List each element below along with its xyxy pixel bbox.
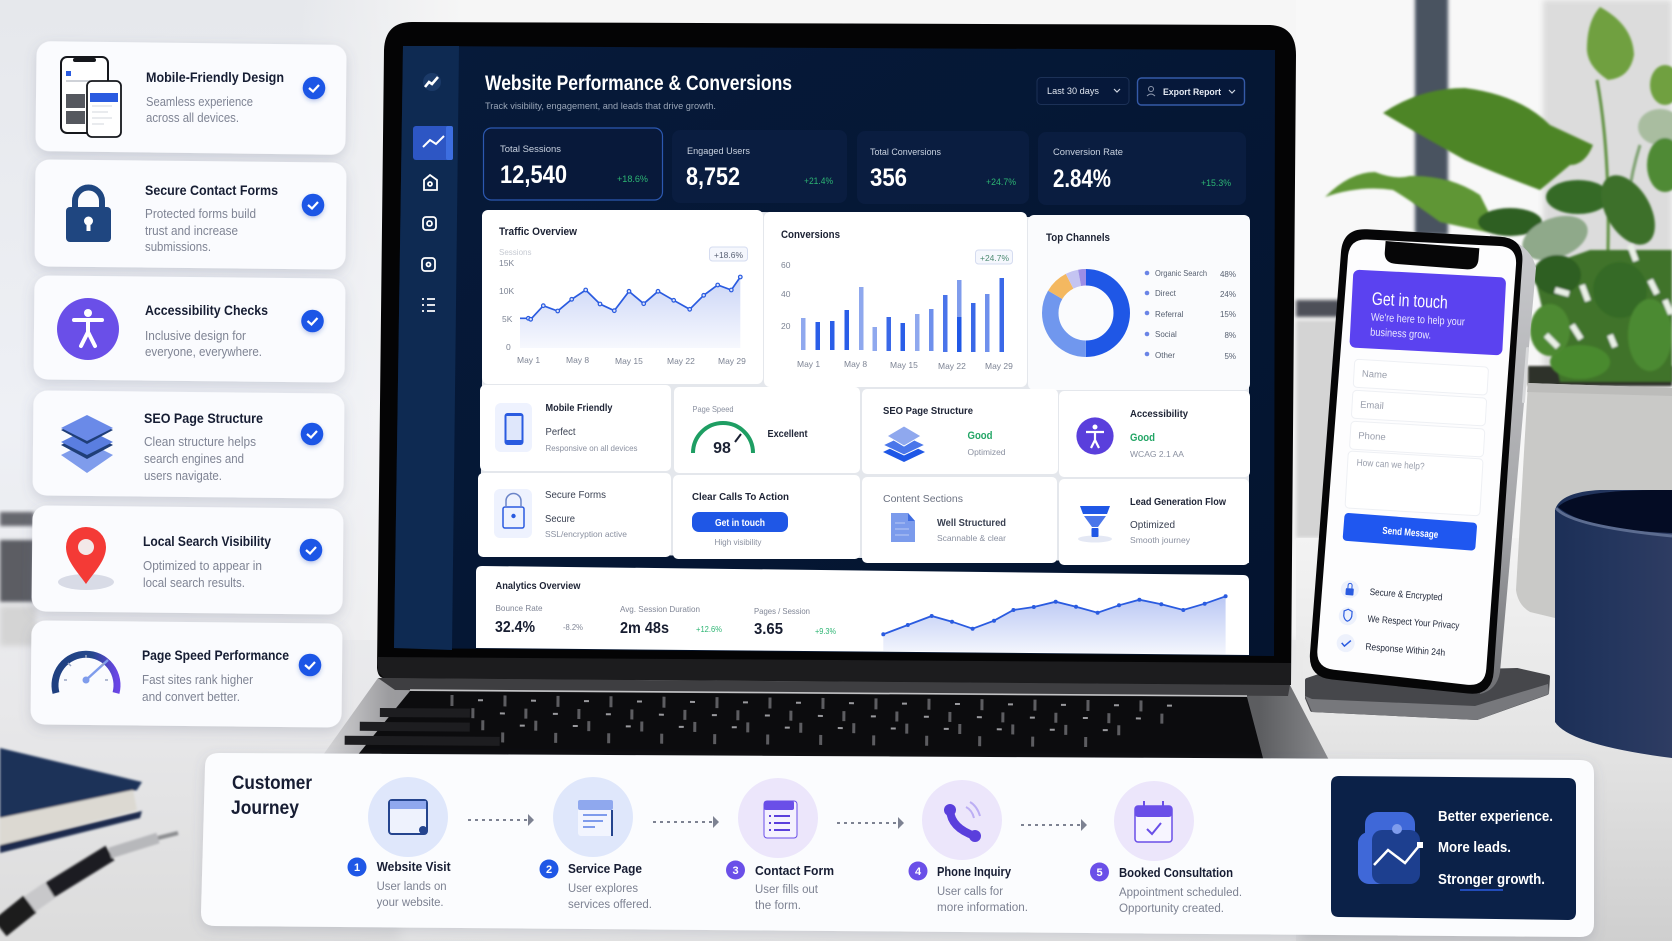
check badge (300, 539, 322, 561)
panel: traffic overview: 10K (499, 286, 514, 296)
icon: accessibility (1076, 417, 1114, 455)
check badge (303, 77, 325, 99)
assurance: secure: Secure & Encrypted (1369, 587, 1443, 603)
panel: conversions: 40 (781, 289, 791, 299)
legend: Referral (1155, 310, 1184, 319)
growth badge (976, 250, 1012, 264)
growth badge: +24.7% (980, 253, 1009, 263)
panel: traffic overview: Sessions (499, 248, 531, 257)
panel: traffic overview: May 29 (718, 356, 746, 366)
card: seo page structure: SEO Page Structure (883, 405, 973, 417)
icon: document (891, 513, 915, 542)
legend: Other (1155, 351, 1175, 360)
card: mobile-friendly design: Seamless experience (146, 95, 253, 109)
journey heading: Journey (231, 798, 299, 819)
screen (394, 46, 1275, 656)
card: page speed: Page Speed (692, 404, 734, 414)
panel: traffic overview: May 15 (615, 356, 643, 366)
step 3: contact form: the form. (755, 900, 801, 912)
metric: bounce rate (495, 603, 583, 636)
legend: 48% (1220, 270, 1236, 279)
icon: padlock (66, 188, 111, 242)
plant pot (1516, 366, 1672, 640)
card: mobile friendly (480, 385, 671, 471)
heading (485, 72, 792, 112)
contact header: Get in touch (1371, 289, 1448, 312)
step 4: phone inquiry: 4 (915, 866, 922, 878)
left leaf (1325, 172, 1500, 235)
step 3: contact form: 3 (732, 865, 739, 877)
card: mobile friendly: Responsive on all devices (546, 443, 638, 453)
metric: bounce rate: -8.2% (563, 622, 583, 632)
card: content sections: Scannable & clear (937, 533, 1006, 543)
step 5: booked consultation: Appointment scheduled. (1119, 887, 1242, 899)
laptop lid (377, 22, 1296, 685)
panel: conversions (764, 212, 1027, 387)
panel: conversions: May 8 (844, 359, 867, 369)
check badge (301, 310, 324, 332)
step 3: contact form: User fills out (755, 884, 819, 896)
step 2: service page: User explores (568, 883, 638, 895)
card: local search visibility: Local Search Visibility (143, 533, 271, 549)
step 2: service page: Service Page (568, 861, 642, 876)
active nav item (413, 126, 453, 160)
card: seo page structure: SEO Page Structure (144, 410, 263, 426)
card: secure forms: SSL/encryption active (545, 529, 627, 539)
icon: speedometer (55, 654, 117, 693)
icon: home (424, 175, 437, 190)
card: seo page structure (32, 390, 345, 499)
card: seo page structure: Good (968, 430, 992, 442)
check badge (302, 194, 324, 216)
metric: session duration (620, 604, 722, 637)
step 2: service page: services offered. (568, 899, 652, 911)
step 4: phone inquiry: Phone Inquiry (937, 864, 1012, 879)
phone notch (1384, 241, 1479, 270)
laptop (318, 22, 1330, 762)
export button (1138, 78, 1244, 105)
panel: traffic overview: May 8 (566, 355, 589, 365)
card: secure contact forms (34, 159, 347, 270)
legend: 24% (1220, 290, 1236, 299)
icon: settings (422, 258, 435, 271)
metric: pages per session: +9.3% (815, 626, 836, 636)
phone stand (1305, 670, 1549, 720)
icon: browser (389, 800, 427, 834)
card: accessibility checks: Accessibility Checks (145, 302, 268, 318)
cta button (692, 512, 788, 532)
growth badge (710, 247, 748, 261)
card: mobile friendly: Perfect (546, 427, 576, 438)
icon: form (764, 801, 797, 838)
stat: total sessions: Total Sessions (500, 144, 561, 155)
arrow 3 (837, 817, 904, 829)
form fields: How can we help? (1356, 457, 1425, 473)
panel: conversions: Conversions (781, 229, 840, 241)
panel: analytics overview (476, 566, 1249, 655)
card: content sections (862, 477, 1057, 563)
panel: analytics overview: Analytics Overview (496, 580, 581, 592)
cta button: Get in touch (715, 518, 765, 529)
card: seo page structure: users navigate. (144, 469, 222, 483)
sidebar (394, 46, 459, 650)
panel: conversions: May 1 (797, 359, 820, 369)
card: accessibility: Accessibility (1130, 408, 1188, 420)
pen (0, 833, 178, 928)
stat: conversion rate: +15.3% (1201, 178, 1231, 188)
card: secure forms (478, 473, 671, 557)
lower foliage (1533, 250, 1672, 382)
arrow 4 (1021, 819, 1087, 831)
panel: traffic overview: May 22 (667, 356, 695, 366)
metric: pages per session: 3.65 (754, 621, 783, 638)
card: local search visibility: Optimized to appear in (143, 559, 262, 573)
contact header (1349, 270, 1506, 355)
card: clear calls to action: High visibility (714, 537, 762, 547)
card: seo page structure: Clean structure helps (144, 435, 256, 449)
send button (1343, 513, 1477, 551)
card: page speed performance: Page Speed Performance (142, 647, 289, 663)
stat: total conversions: +24.7% (986, 177, 1016, 187)
card: page speed performance: Fast sites rank higher (142, 673, 253, 687)
legend (1145, 269, 1236, 361)
icon: image (423, 217, 436, 230)
step 1: website visit: 1 (354, 862, 360, 874)
card: content sections: Well Structured (937, 518, 1006, 529)
card: secure contact forms: Secure Contact Forms (145, 182, 278, 198)
card: lead generation flow: Smooth journey (1130, 535, 1191, 545)
card: accessibility: Good (1130, 432, 1155, 444)
card: seo page structure: Optimized (968, 447, 1006, 457)
top leaf (1587, 7, 1634, 80)
stat: total conversions (857, 131, 1029, 204)
phone (1310, 229, 1536, 694)
stat: engaged users: Engaged Users (687, 146, 750, 157)
card: accessibility checks (33, 275, 346, 383)
panel: traffic overview (482, 210, 763, 384)
legend: Social (1155, 330, 1177, 339)
heading: Website Performance & Conversions (485, 72, 792, 95)
check badge (301, 423, 323, 445)
assurance: secure (1340, 580, 1443, 605)
step 1: website visit: Website Visit (377, 859, 451, 874)
check badge (299, 654, 321, 676)
panel: traffic overview: 0 (506, 342, 511, 352)
icon: logo (423, 73, 441, 91)
date filter: Last 30 days (1047, 86, 1099, 97)
assurance: privacy (1338, 607, 1460, 634)
panel: conversions: 20 (781, 321, 791, 331)
step 4: phone inquiry: User calls for (937, 886, 1003, 898)
form fields: Name (1362, 369, 1388, 381)
card: mobile-friendly design: Mobile-Friendly Design (146, 69, 284, 85)
callout: better experience: Stronger growth. (1438, 872, 1545, 888)
callout: better experience (1331, 776, 1576, 920)
card: page speed performance: and convert better. (142, 690, 240, 704)
legend: Direct (1155, 289, 1177, 298)
card: mobile-friendly design: across all devices. (146, 111, 239, 125)
card grid backing (480, 212, 1249, 563)
step 1: website visit (348, 777, 451, 909)
journey heading: Customer (232, 773, 313, 794)
gauge: 98 (713, 440, 731, 457)
panel: conversions: May 15 (890, 360, 918, 370)
contact header: business grow. (1370, 326, 1431, 342)
assurance: response (1336, 633, 1446, 660)
card: page speed (674, 387, 860, 473)
arrow 2 (653, 816, 719, 828)
stat: total conversions: Total Conversions (870, 147, 941, 158)
icon: layers (61, 415, 113, 473)
panel: traffic overview: Traffic Overview (499, 226, 577, 238)
stat: total conversions: 356 (870, 164, 907, 192)
coffee mug (1555, 490, 1672, 758)
panel: traffic overview: May 1 (517, 355, 540, 365)
panel: conversions: 60 (781, 260, 791, 270)
icon: growth badge (1358, 812, 1423, 884)
metric: session duration: 2m 48s (620, 620, 669, 637)
assurance: privacy: We Respect Your Privacy (1367, 614, 1460, 632)
card: lead generation flow: Lead Generation Flow (1130, 496, 1227, 508)
stat: conversion rate: Conversion Rate (1053, 147, 1123, 158)
form fields (1345, 359, 1489, 516)
icon: accessibility (57, 298, 119, 360)
card: accessibility checks: Inclusive design for (145, 329, 246, 343)
step 3: contact form: Contact Form (755, 863, 834, 878)
form fields: Email (1360, 400, 1384, 412)
arrow 1 (468, 814, 534, 826)
icon: handset (944, 802, 981, 842)
icon: list (422, 299, 435, 311)
step 4: phone inquiry (908, 780, 1028, 914)
card: page speed performance (30, 620, 343, 728)
icon: phone (495, 403, 532, 452)
panel: traffic overview: 15K (499, 258, 514, 268)
step 5: booked consultation: Opportunity created. (1119, 903, 1224, 915)
step 4: phone inquiry: more information. (937, 902, 1028, 914)
card: page speed: Excellent (768, 428, 808, 440)
legend: 15% (1220, 310, 1236, 319)
icon: calendar (1135, 801, 1172, 842)
phone frame (1310, 229, 1536, 694)
card: lead generation flow: Optimized (1130, 520, 1175, 531)
panel: conversions: May 29 (985, 361, 1013, 371)
icon: map pin (58, 527, 114, 590)
form fields: Phone (1358, 431, 1386, 443)
step 3: contact form (726, 778, 834, 912)
metric: bounce rate: 32.4% (495, 619, 535, 636)
card: content sections: Content Sections (883, 493, 963, 505)
step 5: booked consultation: 5 (1096, 867, 1103, 879)
card: accessibility: WCAG 2.1 AA (1130, 449, 1184, 459)
card: lead generation flow (1059, 479, 1249, 565)
panel: top channels (1028, 215, 1250, 390)
card: seo page structure: search engines and (144, 452, 244, 466)
donut chart (1050, 277, 1122, 349)
notebook (0, 748, 142, 853)
card: clear calls to action: Clear Calls To Action (692, 491, 789, 503)
legend: 8% (1224, 331, 1236, 340)
icon: phones (61, 57, 121, 137)
icon: funnel (1078, 506, 1112, 542)
card: secure forms: Secure Forms (545, 490, 606, 501)
card: local search visibility (31, 505, 344, 615)
card: secure contact forms: trust and increase (145, 224, 238, 238)
card: mobile friendly: Mobile Friendly (546, 402, 613, 414)
metric: session duration: +12.6% (696, 624, 722, 634)
step 5: booked consultation (1090, 781, 1242, 915)
card: secure forms: Secure (545, 514, 575, 525)
card: seo page structure (862, 389, 1058, 474)
icon: layers (883, 426, 925, 462)
stat: total sessions: +18.6% (617, 174, 648, 184)
card: accessibility (1059, 391, 1250, 477)
journey heading (231, 773, 313, 819)
stat: conversion rate (1038, 132, 1246, 205)
metric: bounce rate: Bounce Rate (496, 603, 543, 613)
metric: session duration: Avg. Session Duration (620, 604, 700, 614)
plant (1325, 7, 1672, 382)
export button: Export Report (1163, 87, 1222, 98)
large leaf (1383, 88, 1593, 190)
step 1: website visit: your website. (377, 897, 444, 909)
card: mobile-friendly design (35, 41, 347, 155)
panel: traffic overview: 5K (502, 314, 513, 324)
stat: total sessions: 12,540 (500, 161, 567, 189)
contact header: We're here to help your (1371, 311, 1465, 328)
step 2: service page (540, 777, 652, 911)
send button: Send Message (1382, 526, 1439, 541)
panel: conversions: May 22 (938, 361, 966, 371)
growth badge: +18.6% (714, 250, 743, 260)
date filter (1037, 78, 1129, 104)
icon: lock (494, 489, 532, 538)
step 1: website visit: User lands on (377, 881, 447, 893)
stat: engaged users: +21.4% (804, 176, 833, 186)
metric: pages per session: Pages / Session (754, 606, 810, 616)
laptop base and keyboard (318, 678, 1330, 762)
card: local search visibility: local search results. (143, 576, 245, 590)
icon: page (578, 800, 613, 836)
gauge (693, 423, 753, 457)
line chart (520, 275, 742, 348)
area chart (881, 594, 1228, 654)
assurance: response: Response Within 24h (1365, 642, 1446, 659)
stat: total sessions (484, 128, 662, 200)
panel: top channels: Top Channels (1046, 232, 1110, 244)
callout: better experience: More leads. (1438, 840, 1511, 856)
card: secure contact forms: Protected forms build (145, 207, 256, 221)
card: secure contact forms: submissions. (145, 240, 211, 254)
metric: pages per session (754, 606, 836, 638)
legend: 5% (1224, 352, 1236, 361)
step 5: booked consultation: Booked Consultation (1119, 865, 1233, 880)
callout: better experience: Better experience. (1438, 809, 1553, 825)
card: accessibility checks: everyone, everywhere. (145, 345, 262, 359)
bar chart (801, 278, 1004, 352)
panel: customer journey (201, 753, 1594, 937)
step 2: service page: 2 (546, 864, 552, 876)
card: clear calls to action (673, 475, 860, 559)
heading: Track visibility, engagement, and leads that drive growth. (485, 101, 716, 112)
phone screen content (1324, 239, 1510, 662)
stat: conversion rate: 2.84% (1053, 165, 1111, 193)
stat: engaged users: 8,752 (686, 163, 740, 191)
legend: Organic Search (1155, 269, 1207, 278)
stat: engaged users (672, 130, 847, 203)
